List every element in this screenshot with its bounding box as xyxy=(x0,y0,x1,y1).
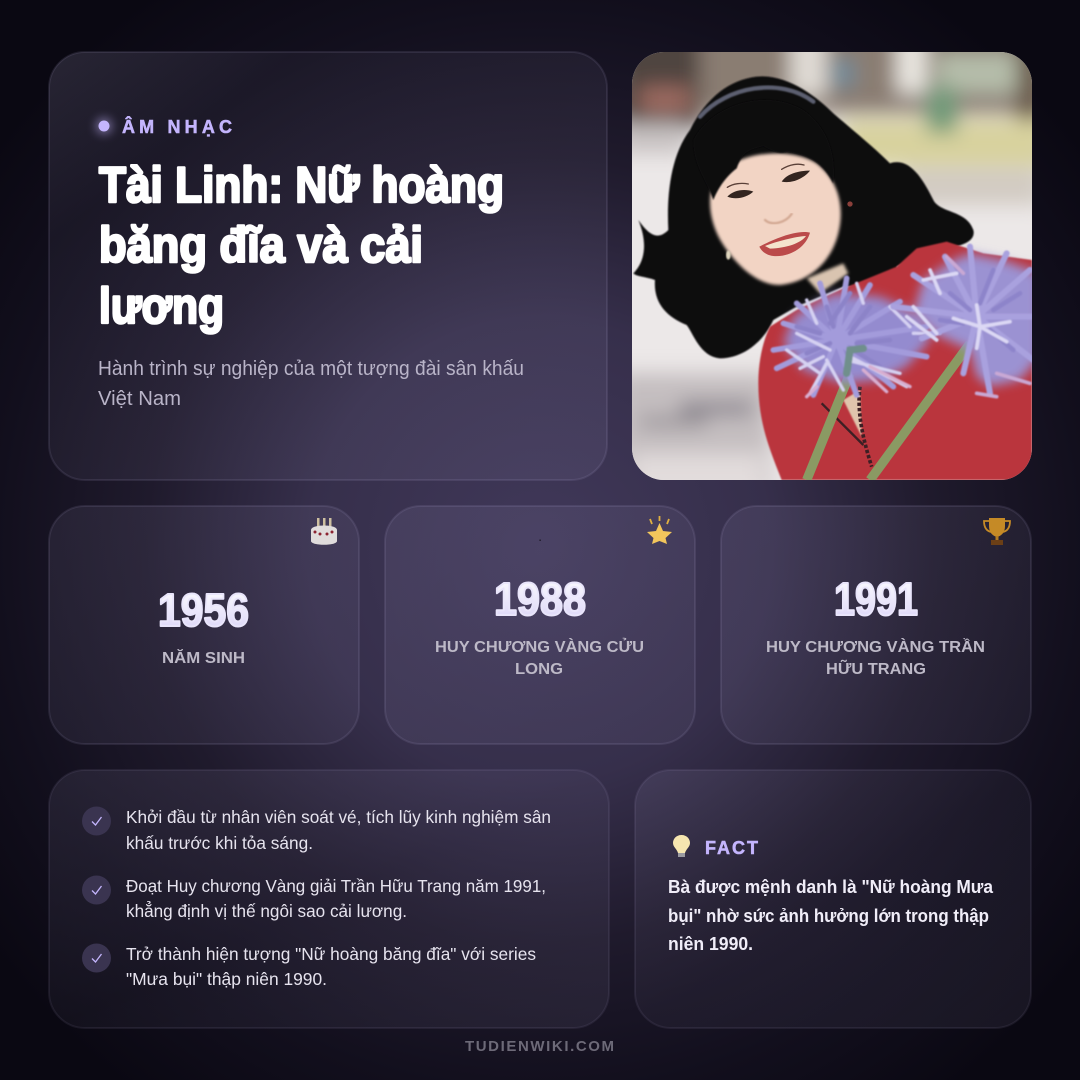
highlight item 2 xyxy=(82,876,546,921)
highlight item 3: "Mưa bụi" thập niên 1990. xyxy=(126,969,327,989)
speck xyxy=(540,540,541,541)
icon: light bulb xyxy=(673,835,690,857)
chest opening and dress trim xyxy=(843,390,862,437)
fact text xyxy=(668,877,994,954)
title xyxy=(99,157,504,334)
year: 1991 xyxy=(834,573,918,625)
fact text: bụi" nhờ sức ảnh hưởng lớn trong thập xyxy=(668,906,989,926)
footer watermark: TUDIENWIKI.COM xyxy=(465,1038,614,1055)
fact text: Bà được mệnh danh là "Nữ hoàng Mưa xyxy=(668,877,994,897)
neck and collar xyxy=(807,263,848,293)
portrait photo xyxy=(632,52,1032,480)
background: trees and garden xyxy=(632,52,1032,480)
highlight item 3: Trở thành hiện tượng "Nữ hoàng băng đĩa" với series xyxy=(126,944,536,964)
title: băng đĩa và cải xyxy=(99,217,423,273)
highlight item 1: khấu trước khi tỏa sáng. xyxy=(126,833,313,853)
icon: birthday cake xyxy=(311,518,337,545)
title: lương xyxy=(99,278,224,334)
hair highlights xyxy=(700,87,813,117)
icon: glowing star xyxy=(647,516,672,544)
highlight item 2: Đoạt Huy chương Vàng giải Trần Hữu Trang năm 1991, xyxy=(126,876,546,896)
subtitle: Hành trình sự nghiệp của một tượng đài sân khấu xyxy=(98,358,524,380)
category tag: ÂM NHẠC xyxy=(122,116,232,137)
flower cluster left xyxy=(773,278,940,397)
icon: trophy xyxy=(984,518,1010,545)
fact heading: FACT xyxy=(705,838,758,858)
nose xyxy=(765,214,792,223)
stat card: 1988 xyxy=(385,506,695,744)
stat label: LONG xyxy=(515,661,563,678)
stat label xyxy=(435,637,644,678)
panel: title card xyxy=(49,52,607,480)
highlight item 1: Khởi đầu từ nhân viên soát vé, tích lũy kinh nghiệm sân xyxy=(126,807,551,827)
mouth xyxy=(759,232,810,256)
red dress xyxy=(758,242,1032,480)
panel: career highlights xyxy=(49,770,609,1028)
eyes xyxy=(727,164,810,198)
hair xyxy=(633,76,974,358)
stat card: 1991 xyxy=(721,506,1031,744)
stat label: HỮU TRANG xyxy=(826,658,926,678)
stat label: HUY CHƯƠNG VÀNG TRẦN xyxy=(766,637,985,656)
flower cluster right xyxy=(893,247,1040,397)
highlight item 1 xyxy=(82,806,551,853)
year: 1988 xyxy=(494,573,586,625)
title: Tài Linh: Nữ hoàng xyxy=(99,157,504,213)
stat label xyxy=(766,637,985,678)
stat label: NĂM SINH xyxy=(162,648,245,667)
highlight item 3 xyxy=(82,944,536,989)
subtitle: Việt Nam xyxy=(98,388,181,410)
year: 1956 xyxy=(158,584,249,636)
stems xyxy=(807,373,850,480)
stat card: 1956 xyxy=(49,506,359,744)
bangs xyxy=(708,150,834,200)
panel: fact xyxy=(635,770,1031,1028)
earrings xyxy=(726,250,731,260)
stat label: HUY CHƯƠNG VÀNG CỬU xyxy=(435,637,644,656)
fact text: niên 1990. xyxy=(668,934,753,954)
face xyxy=(710,153,841,285)
highlight item 2: khẳng định vị thế ngôi sao cải lương. xyxy=(126,900,407,921)
subtitle xyxy=(98,358,524,410)
